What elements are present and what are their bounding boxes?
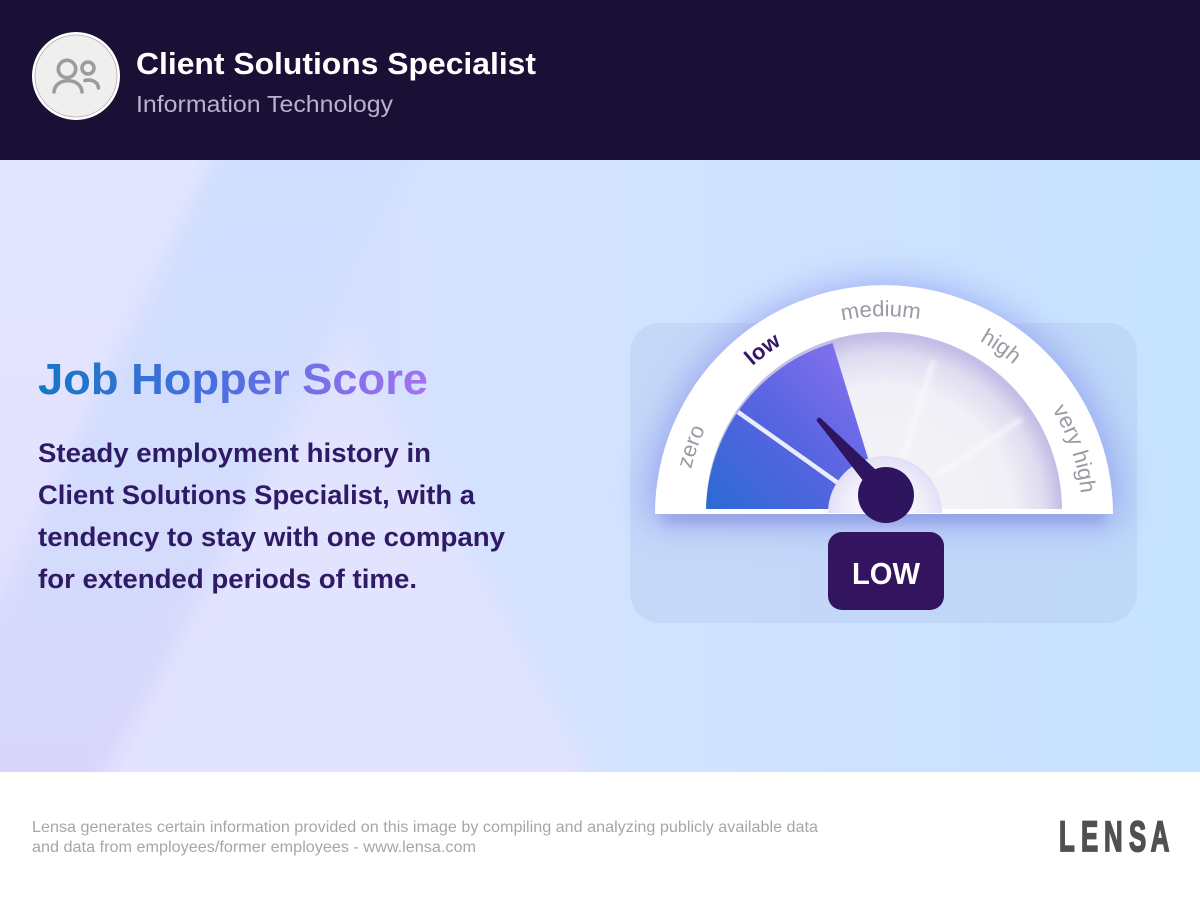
- description text: [38, 438, 505, 594]
- footer disclaimer: Lensa generates certain information provided on this image by compiling and analyzing publicly available data: [32, 819, 818, 836]
- icon: avatar people: [32, 32, 120, 120]
- job title: Client Solutions Specialist: [136, 46, 536, 81]
- gauge scale labels: medium: [842, 300, 920, 320]
- gauge scale labels: high: [981, 328, 1019, 364]
- header bar: [0, 0, 1200, 160]
- gauge scale labels: zero: [680, 426, 704, 468]
- description text: Steady employment history in: [38, 438, 431, 468]
- base line: [706, 509, 1062, 513]
- dial soft ticks: [903, 362, 1020, 475]
- description text: tendency to stay with one company: [38, 522, 505, 552]
- gauge: [632, 265, 1136, 540]
- active sectors zero and low: [706, 343, 884, 510]
- heading: Job Hopper Score: Job Hopper Score: [38, 355, 428, 404]
- panel: gauge backdrop: [630, 323, 1137, 623]
- description text: for extended periods of time.: [38, 564, 417, 594]
- gauge scale labels: [680, 300, 1096, 492]
- footer: [0, 772, 1200, 900]
- base shadow: [662, 512, 1106, 522]
- gauge rim: [655, 285, 1113, 514]
- gauge scale labels: low: [743, 334, 780, 366]
- gauge scale labels: very high: [1054, 404, 1096, 492]
- footer disclaimer: [32, 819, 818, 856]
- background panel: [0, 130, 1200, 810]
- hub: [828, 456, 942, 513]
- needle: [816, 418, 914, 523]
- score badge: LOW: [828, 532, 944, 610]
- score badge: LOW: LOW: [852, 556, 921, 591]
- job category: Information Technology: [136, 91, 394, 117]
- gauge glow: [650, 286, 1118, 520]
- description text: Client Solutions Specialist, with a: [38, 480, 476, 510]
- footer disclaimer: and data from employees/former employees - www.lensa.com: [32, 839, 476, 856]
- Lensa logo: LENSA: [1059, 812, 1169, 861]
- dial face: [706, 332, 1062, 510]
